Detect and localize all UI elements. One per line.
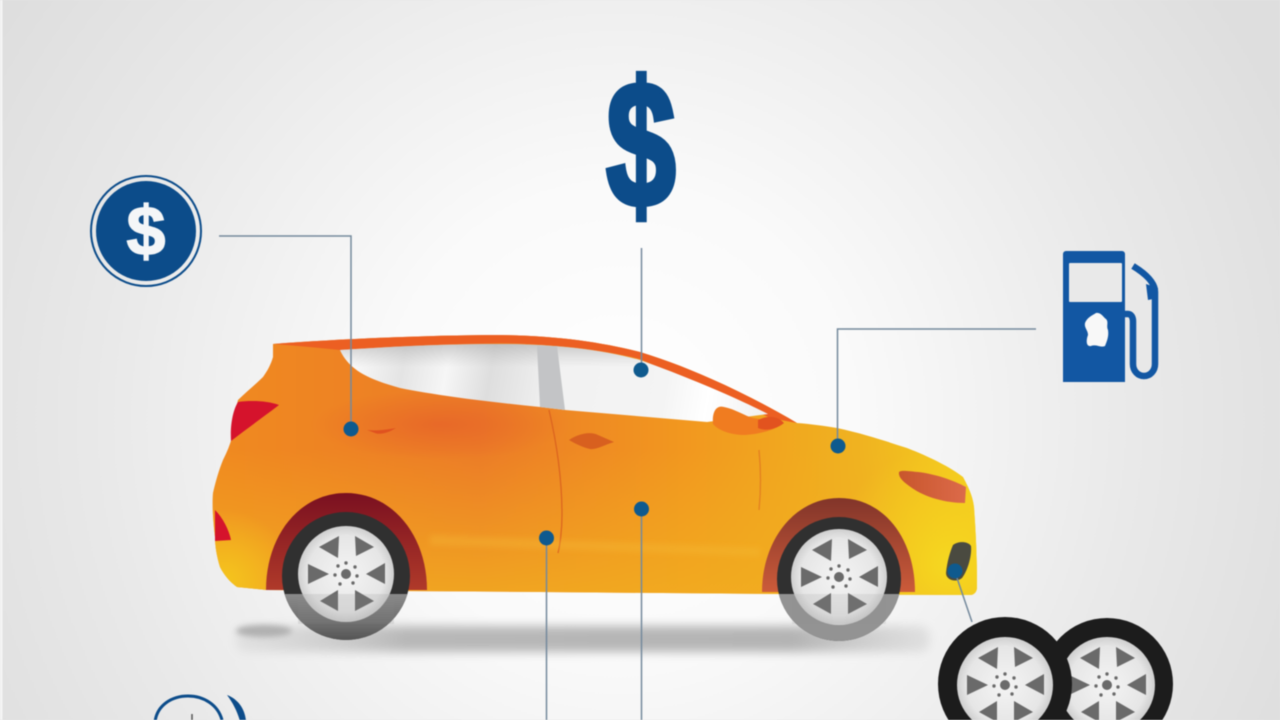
door seams [549,410,760,553]
icon: dollar coin: $ [127,192,165,270]
spare wheels [938,617,1173,720]
front wheel arch [762,498,915,592]
rear wheel arch [266,493,427,590]
icon: fuel pump [1063,251,1158,382]
car [205,330,985,641]
fog lamp [946,542,971,580]
icon: large dollar sign: $ [606,45,676,244]
body crease highlight [430,535,760,556]
left edge strip [0,0,2,720]
rear door handle [367,428,396,434]
spare wheel left [938,617,1072,720]
ground shadow [236,625,930,652]
door pillar [537,346,565,410]
window [340,344,768,422]
roof stripe [273,335,797,423]
icon: gauge (cropped at the bottom) [155,695,246,720]
side mirror [713,407,784,435]
door handle [569,433,614,449]
tail light upper [231,401,279,441]
spare wheel right [1041,618,1173,720]
tail light lower [215,510,231,541]
connector dots [344,362,962,578]
connector lines [219,236,1036,720]
car body [205,330,985,600]
front wheel [777,517,901,641]
icon: dollar coin [91,176,201,286]
rear wheel [282,512,410,640]
head light [899,471,966,503]
